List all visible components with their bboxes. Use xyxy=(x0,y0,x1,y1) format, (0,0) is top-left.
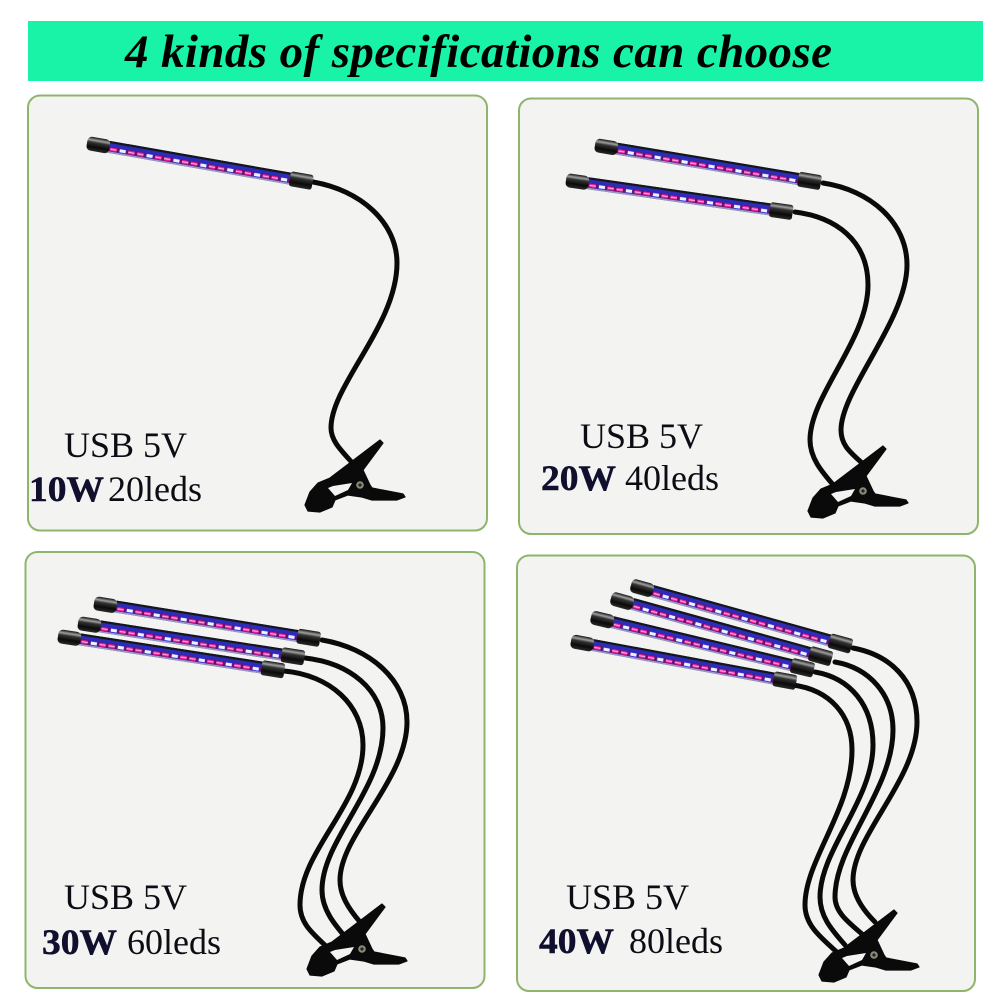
spec text: 30W: 30W xyxy=(42,922,117,962)
spec text: 20W: 20W xyxy=(541,458,616,498)
panel: 20W lamp xyxy=(519,98,978,534)
spec text: USB 5V: USB 5V xyxy=(580,416,703,456)
spec text: 10W: 10W xyxy=(29,469,104,509)
spec text: 40W: 40W xyxy=(539,921,614,961)
spec text: 40leds: 40leds xyxy=(625,458,719,498)
lamp: double head gooseneck xyxy=(565,138,908,518)
lamp: triple head gooseneck xyxy=(57,596,407,976)
spec text: 80leds: 80leds xyxy=(629,921,723,961)
spec text: USB 5V: USB 5V xyxy=(566,877,689,917)
title banner xyxy=(28,21,983,81)
spec text: USB 5V: USB 5V xyxy=(64,877,187,917)
panel: 10W lamp xyxy=(28,96,487,530)
lamp: single head gooseneck xyxy=(86,136,405,512)
title text: 4 kinds of specifications can choose xyxy=(124,26,832,78)
spec text: USB 5V: USB 5V xyxy=(64,425,187,465)
panel: 40W lamp xyxy=(517,556,975,991)
lamp: quad head gooseneck xyxy=(570,578,919,982)
spec text: 20leds: 20leds xyxy=(108,469,202,509)
panel: 30W lamp xyxy=(26,552,484,988)
spec text: 60leds: 60leds xyxy=(127,922,221,962)
